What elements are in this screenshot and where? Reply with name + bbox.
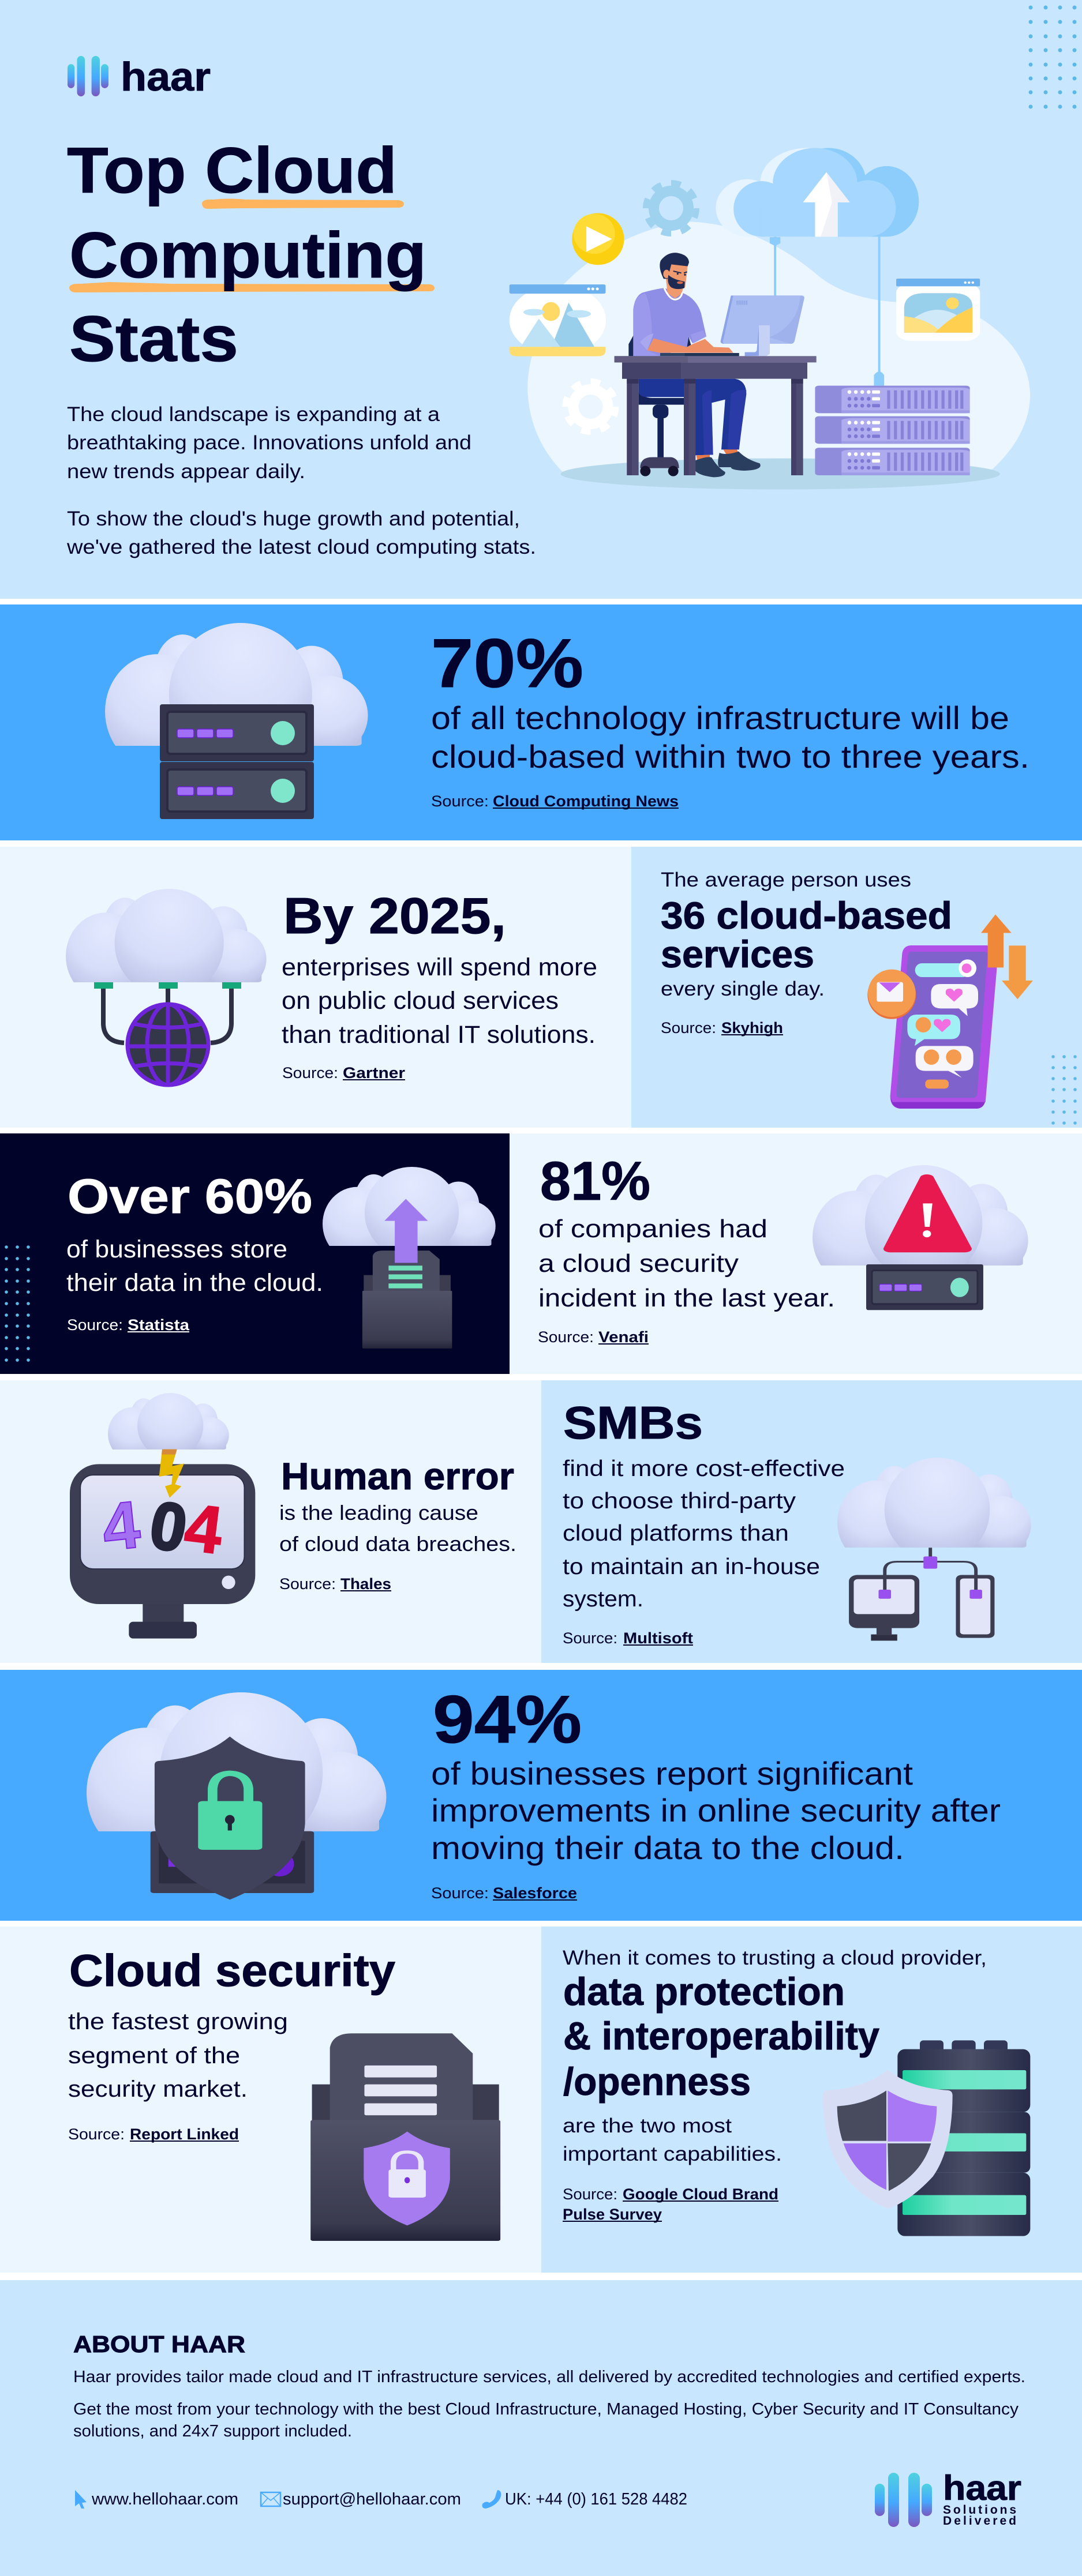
icon: cloud with warning triangle and server bbox=[813, 1165, 1028, 1310]
icon: cloud with globe bbox=[66, 889, 267, 1086]
man bbox=[633, 253, 761, 477]
stat text: to choose third-party bbox=[563, 1489, 796, 1514]
image window: left bbox=[510, 284, 606, 356]
stat heading: /openness bbox=[563, 2060, 751, 2104]
stat heading: 70% bbox=[431, 625, 583, 702]
about text: Get the most from your technology with the best Cloud Infrastructure, Managed Hosting, Cyber Security and IT Consultancy bbox=[73, 2400, 1019, 2419]
stat heading bbox=[661, 894, 952, 975]
dot pattern: left edge bbox=[5, 1245, 30, 1362]
stat text: enterprises will spend more bbox=[282, 953, 597, 981]
stat text: cloud-based within two to three years. bbox=[431, 738, 1029, 775]
stat heading: Cloud security bbox=[69, 1945, 395, 1996]
source: Source: bbox=[563, 1629, 617, 1647]
source: Source: bbox=[538, 1328, 594, 1346]
icon: folder with document and lock shield bbox=[310, 2033, 500, 2241]
stat text bbox=[68, 2009, 288, 2102]
source: Google Cloud Brand bbox=[623, 2186, 778, 2203]
stat heading: data protection bbox=[563, 1970, 845, 2014]
source: Source: bbox=[431, 1884, 489, 1902]
stat text: are the two most bbox=[563, 2115, 732, 2137]
source: Skyhigh bbox=[721, 1019, 783, 1037]
gear: white bbox=[565, 381, 616, 432]
intro text: The average person uses bbox=[661, 869, 911, 891]
chair bbox=[628, 335, 692, 476]
stat heading: Human error bbox=[281, 1455, 514, 1497]
stat text bbox=[431, 1755, 1001, 1866]
stat heading bbox=[563, 1970, 879, 2104]
intro text: The cloud landscape is expanding at a bbox=[67, 403, 440, 426]
play button bbox=[572, 213, 624, 265]
stat text: find it more cost-effective bbox=[563, 1456, 845, 1481]
stat text: every single day. bbox=[661, 978, 825, 1000]
image window: right bbox=[896, 279, 980, 341]
stat text: of all technology infrastructure will be bbox=[431, 700, 1009, 736]
source bbox=[67, 1316, 190, 1334]
contact: website: www.hellohaar.com bbox=[91, 2490, 238, 2509]
panel: human error bbox=[0, 1380, 541, 1663]
source: Statista bbox=[128, 1316, 190, 1334]
source: Venafi bbox=[598, 1328, 649, 1346]
source: Source: bbox=[67, 1316, 123, 1334]
about text bbox=[73, 2368, 1025, 2440]
panel: 81% bbox=[510, 1133, 1082, 1374]
logo: haar solutions delivered: haar bbox=[943, 2469, 1021, 2507]
desk bbox=[615, 356, 817, 475]
source: Source: bbox=[431, 793, 489, 810]
stat text bbox=[431, 700, 1029, 775]
gear: blue bbox=[646, 183, 697, 234]
icon: cloud with servers bbox=[105, 623, 368, 819]
stat text: of cloud data breaches. bbox=[279, 1532, 516, 1556]
intro text: breathtaking pace. Innovations unfold and bbox=[67, 431, 471, 454]
title: Stats bbox=[69, 303, 238, 375]
source bbox=[431, 1884, 577, 1902]
stat heading: & interoperability bbox=[563, 2014, 879, 2058]
stat text: the fastest growing bbox=[68, 2009, 288, 2034]
title: Computing bbox=[69, 219, 426, 291]
source: Source: bbox=[68, 2126, 125, 2143]
source: Source: bbox=[563, 2186, 617, 2203]
contact: phone: UK: +44 (0) 161 528 4482 bbox=[505, 2490, 687, 2509]
stat heading: Over 60% bbox=[68, 1169, 312, 1223]
stat text: segment of the bbox=[68, 2043, 240, 2068]
logo: haar solutions delivered: Delivered bbox=[943, 2514, 1016, 2528]
title bbox=[67, 134, 435, 375]
stat text: moving their data to the cloud. bbox=[431, 1830, 904, 1866]
panel: data protection bbox=[541, 1927, 1082, 2273]
intro text: To show the cloud's huge growth and potential, bbox=[67, 508, 520, 530]
floor shadow bbox=[561, 459, 1000, 490]
about text: solutions, and 24x7 support included. bbox=[73, 2422, 352, 2440]
icon: cloud, lightning and 404 monitor bbox=[70, 1393, 255, 1639]
stat heading: SMBs bbox=[563, 1397, 703, 1448]
source bbox=[279, 1575, 391, 1593]
source: Gartner bbox=[343, 1064, 406, 1082]
heading: ABOUT HAAR bbox=[73, 2331, 245, 2357]
icon: cloud with shield and lock bbox=[87, 1692, 386, 1899]
about text: Haar provides tailor made cloud and IT infrastructure services, all delivered by accredited technologies and certified experts. bbox=[73, 2368, 1025, 2386]
panel: by 2025 bbox=[0, 847, 631, 1128]
panel: about haar footer bbox=[0, 2280, 1082, 2576]
title: Top Cloud bbox=[67, 134, 397, 206]
stat text bbox=[279, 1501, 516, 1556]
stat heading: 81% bbox=[540, 1151, 650, 1212]
intro text bbox=[66, 403, 536, 558]
stat text: of companies had bbox=[538, 1215, 767, 1243]
stat text: cloud platforms than bbox=[563, 1521, 789, 1546]
icon: cloud connected to devices bbox=[837, 1458, 1031, 1640]
stat heading: By 2025, bbox=[283, 887, 506, 944]
stat text: their data in the cloud. bbox=[66, 1269, 323, 1297]
stat text bbox=[563, 1456, 845, 1612]
source bbox=[68, 2126, 239, 2143]
stat text bbox=[282, 953, 597, 1049]
intro text: new trends appear daily. bbox=[67, 460, 305, 483]
stat text bbox=[538, 1215, 835, 1312]
stat text: on public cloud services bbox=[282, 987, 559, 1015]
monitor bbox=[660, 295, 804, 356]
logo: haar: haar bbox=[121, 54, 211, 99]
source: Multisoft bbox=[623, 1629, 693, 1647]
stat text: to maintain an in-house bbox=[563, 1554, 820, 1579]
cables bbox=[775, 236, 879, 373]
stat text: improvements in online security after bbox=[431, 1792, 1001, 1828]
stat text: incident in the last year. bbox=[538, 1284, 835, 1312]
source bbox=[282, 1064, 406, 1082]
panel: hero bbox=[0, 0, 1082, 599]
panel: cloud security bbox=[0, 1927, 541, 2273]
source bbox=[661, 1019, 783, 1037]
logo: haar bbox=[68, 54, 211, 99]
logo: haar solutions delivered: Solutions bbox=[943, 2503, 1016, 2517]
source: Source: bbox=[279, 1575, 336, 1593]
contact: email: support@hellohaar.com bbox=[283, 2490, 461, 2509]
source bbox=[538, 1328, 649, 1346]
cloud with upload arrow bbox=[716, 148, 919, 236]
panel: 94% stat bbox=[0, 1670, 1082, 1921]
stat text bbox=[563, 2115, 782, 2165]
stat text: of businesses store bbox=[66, 1236, 287, 1263]
server rack bbox=[815, 386, 970, 475]
panel: over 60% bbox=[0, 1133, 510, 1374]
stat text: of businesses report significant bbox=[431, 1755, 913, 1792]
source: Source: bbox=[282, 1064, 338, 1082]
icon: cloud, lightning and 404 monitor: 4 bbox=[99, 1486, 144, 1565]
stat text: important capabilities. bbox=[563, 2143, 782, 2165]
icon: cloud, lightning and 404 monitor: 4 bbox=[181, 1489, 227, 1568]
panel: SMBs bbox=[541, 1380, 1082, 1663]
icon: cloud upload to folder bbox=[323, 1167, 496, 1349]
source: Pulse Survey bbox=[563, 2206, 662, 2223]
source: Salesforce bbox=[493, 1884, 577, 1902]
icon: database with shield bbox=[823, 2040, 1030, 2236]
stat text: security market. bbox=[68, 2076, 248, 2102]
icon: cloud, lightning and 404 monitor: 0 bbox=[145, 1487, 192, 1567]
dot pattern: top right bbox=[1028, 6, 1077, 108]
panel: 70% stat bbox=[0, 604, 1082, 840]
background blob bbox=[527, 221, 1030, 472]
stat text: a cloud security bbox=[538, 1249, 739, 1278]
panel: 36 cloud-based services bbox=[631, 847, 1082, 1128]
logo: haar solutions delivered bbox=[875, 2469, 1021, 2528]
source bbox=[563, 2186, 778, 2223]
source: Thales bbox=[340, 1575, 391, 1593]
source: Source: bbox=[661, 1019, 716, 1037]
dot pattern: right edge bbox=[1051, 1055, 1077, 1171]
source: Cloud Computing News bbox=[493, 793, 679, 810]
stat text: system. bbox=[563, 1587, 643, 1612]
stat text: is the leading cause bbox=[279, 1501, 478, 1524]
stat heading: 94% bbox=[433, 1681, 582, 1757]
source: Report Linked bbox=[130, 2126, 239, 2143]
stat heading: services bbox=[661, 933, 814, 975]
intro text: we've gathered the latest cloud computing stats. bbox=[66, 536, 536, 558]
stat text: than traditional IT solutions. bbox=[282, 1021, 596, 1049]
illustration: man at desk with cloud and servers bbox=[510, 148, 1030, 490]
source bbox=[563, 1629, 693, 1647]
stat heading: 36 cloud-based bbox=[661, 894, 952, 937]
icon: phone with chat bubbles bbox=[867, 914, 1033, 1109]
intro text: When it comes to trusting a cloud provider, bbox=[563, 1947, 987, 1969]
stat text bbox=[66, 1236, 323, 1297]
